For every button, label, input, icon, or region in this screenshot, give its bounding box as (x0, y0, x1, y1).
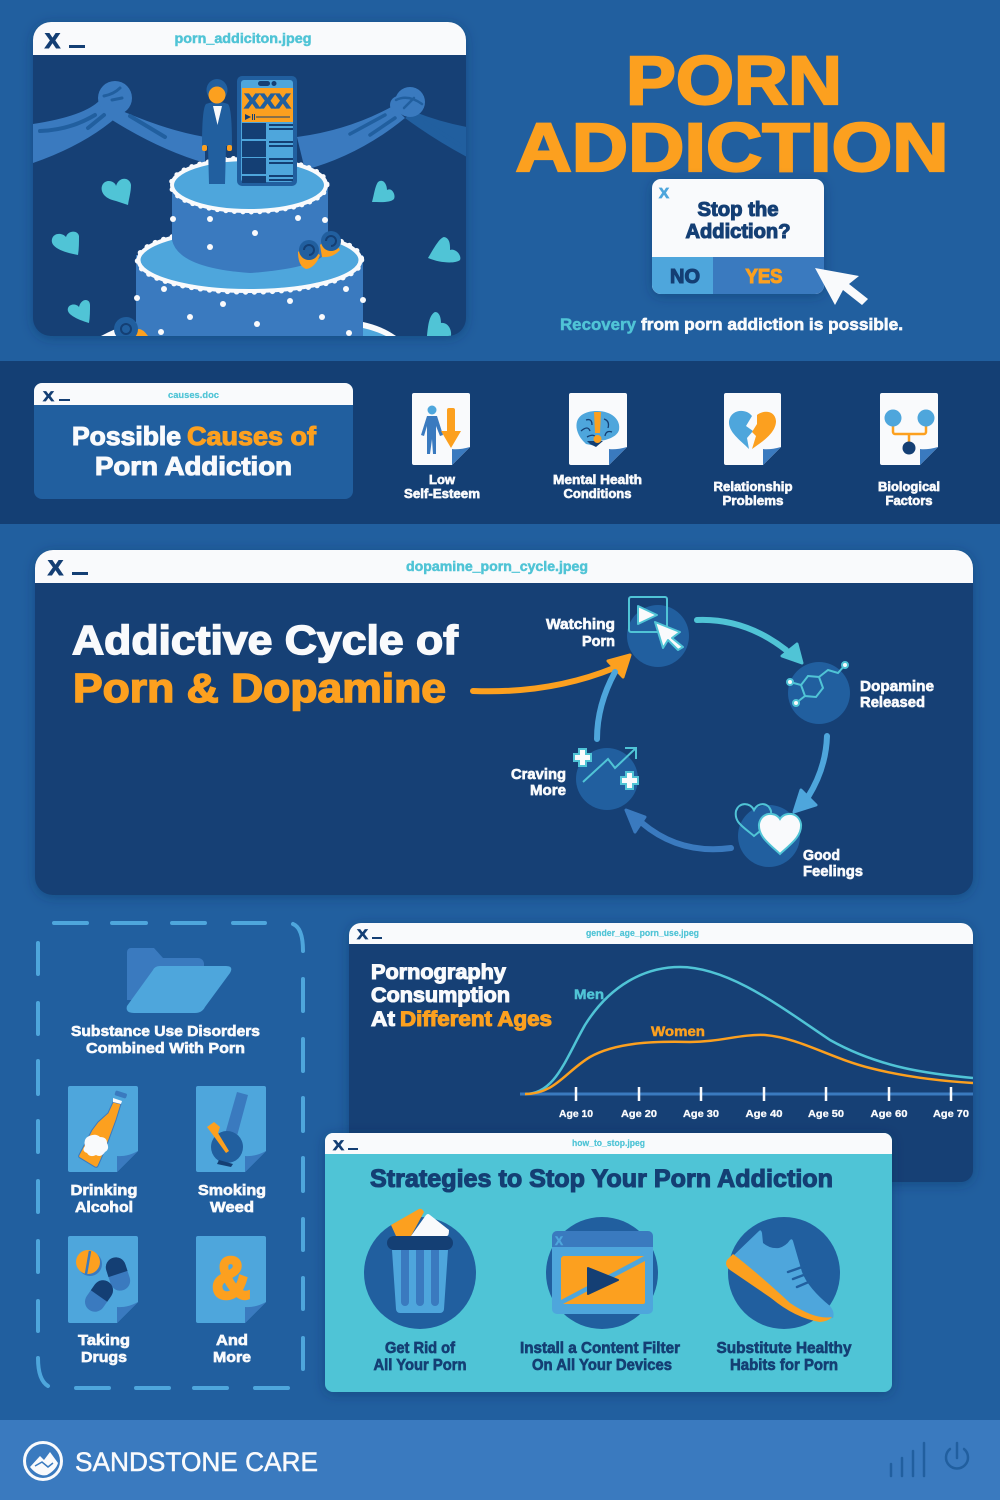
panel: causes heading: Causes of (187, 421, 316, 451)
popup: stop the addiction (652, 179, 868, 305)
cause: low self-esteem: Low (429, 472, 456, 487)
cause: mental health (553, 393, 642, 501)
panel: causes heading (34, 383, 353, 499)
cause: mental health: Conditions (564, 486, 632, 501)
panel: wedding cake window (33, 22, 467, 341)
step: watching porn: Porn (582, 633, 615, 650)
line chart: Women (651, 1023, 705, 1039)
item: and more: & (212, 1246, 250, 1311)
dashed border (38, 923, 303, 1388)
step: dopamine released: Dopamine (860, 678, 934, 695)
line chart: Men (574, 986, 604, 1002)
illustration: cake and ribbons: XXX (244, 91, 291, 113)
step: watching porn (546, 597, 689, 667)
chart heading: At (371, 1008, 395, 1031)
strategy: healthy habits: Habits for Porn (730, 1357, 838, 1374)
step: good feelings (736, 804, 863, 880)
panel: addictive cycle: X (48, 557, 63, 580)
icon: signal bars and power (891, 1443, 968, 1476)
cause: biological factors (878, 393, 940, 508)
title: ADDICTION (516, 109, 948, 186)
panel: wedding cake window: X (45, 30, 60, 53)
item: smoking weed: Weed (210, 1199, 254, 1216)
strategy: content filter: Install a Content Filter (520, 1340, 680, 1357)
popup: stop the addiction: X (659, 185, 669, 202)
heading (71, 1023, 260, 1057)
line chart: Age 70 (933, 1108, 969, 1120)
heading: Addictive Cycle of (72, 617, 458, 663)
logo (24, 1442, 62, 1480)
item: drinking alcohol: Alcohol (75, 1199, 133, 1216)
step: good feelings: Good (803, 847, 840, 864)
strategies heading: Strategies to Stop Your Porn Addiction (370, 1165, 833, 1193)
arrow: back to watching (597, 672, 615, 739)
chart heading: Consumption (371, 984, 510, 1007)
icon: folder (127, 948, 231, 1013)
line chart: Age 50 (808, 1108, 844, 1120)
roses (298, 249, 320, 269)
panel: causes heading: causes.doc (168, 390, 219, 400)
item: drinking alcohol (68, 1086, 138, 1216)
recovery statement: Recovery (560, 315, 637, 334)
cake tiers (101, 322, 396, 336)
strategy: get rid of porn: Get Rid of (385, 1340, 456, 1357)
cause: relationship problems: Problems (722, 493, 784, 508)
panel: age chart: X (357, 926, 369, 942)
heading: Substance Use Disorders (71, 1023, 260, 1040)
panel: causes heading: Porn Addiction (95, 451, 292, 481)
strategy: get rid of porn (364, 1209, 476, 1374)
step: craving more: More (530, 782, 566, 799)
line chart (520, 967, 973, 1120)
panel: age chart: gender_age_porn_use.jpeg (586, 928, 699, 938)
phone with XXX (237, 76, 297, 186)
line chart: Age 10 (559, 1108, 593, 1120)
line chart: Age 20 (621, 1108, 657, 1120)
popup: stop the addiction: Stop the (698, 199, 778, 221)
item: taking drugs: Drugs (81, 1349, 127, 1366)
strategy: get rid of porn: All Your Porn (374, 1357, 466, 1374)
strategy: content filter: On All Your Devices (532, 1357, 672, 1374)
item: smoking weed (196, 1086, 266, 1216)
cause: relationship problems: Relationship (714, 479, 793, 494)
cause: biological factors: Factors (886, 493, 932, 508)
step: dopamine released (787, 662, 934, 724)
chart heading: Different Ages (400, 1008, 552, 1031)
illustration: cake and ribbons (33, 76, 467, 341)
step: dopamine released: Released (860, 694, 925, 711)
title (516, 42, 948, 186)
item: and more: More (213, 1349, 251, 1366)
arrow: to craving (626, 810, 731, 849)
item: and more (196, 1236, 266, 1366)
panel: wedding cake window: porn_addiciton.jpeg (174, 30, 312, 46)
line chart: Age 30 (683, 1108, 719, 1120)
step: good feelings: Feelings (803, 863, 863, 880)
strategy: healthy habits (716, 1217, 852, 1374)
footer (0, 1420, 1000, 1500)
cause: low self-esteem (404, 393, 480, 501)
popup: stop the addiction: NO (670, 266, 700, 288)
heading: Porn & Dopamine (73, 665, 446, 711)
recovery statement: from porn addiction is possible. (641, 315, 903, 334)
item: and more: And (216, 1332, 248, 1349)
band: possible causes (0, 361, 1000, 524)
groom figure (202, 102, 232, 184)
item: drinking alcohol: Drinking (70, 1182, 138, 1199)
strategy: content filter (520, 1217, 680, 1374)
panel: addictive cycle (35, 550, 973, 895)
panel: addictive cycle: dopamine_porn_cycle.jpeg (406, 558, 588, 574)
title: PORN (626, 42, 842, 119)
heading (72, 617, 458, 711)
strategy: healthy habits: Substitute Healthy (716, 1340, 852, 1357)
arrow: to good feelings (794, 736, 827, 812)
step: craving more: Craving (511, 766, 566, 783)
chart heading: Pornography (371, 961, 506, 984)
women curve (525, 1035, 973, 1094)
panel: causes heading: X (43, 388, 55, 404)
men curve (525, 967, 973, 1094)
line chart: Age 60 (870, 1108, 908, 1120)
popup: stop the addiction: YES (746, 266, 782, 288)
panel: strategies: how_to_stop.jpeg (572, 1138, 645, 1148)
item: taking drugs: Taking (78, 1332, 130, 1349)
footer: SANDSTONE CARE (75, 1447, 318, 1477)
panel: age chart (349, 923, 973, 1182)
cause: relationship problems (714, 393, 793, 508)
item: smoking weed: Smoking (198, 1182, 266, 1199)
icon: cursor (815, 268, 868, 305)
cause: mental health: Mental Health (553, 472, 642, 487)
item: taking drugs (68, 1236, 138, 1366)
cause: biological factors: Biological (878, 479, 940, 494)
line chart: Age 40 (746, 1108, 783, 1120)
arrow: to dopamine (697, 620, 802, 663)
panel: strategies: X (333, 1137, 345, 1153)
panel: strategies (325, 1133, 892, 1392)
step: craving more (511, 748, 638, 810)
arrow: entry into cycle (473, 655, 630, 691)
panel: substance use disorders (38, 923, 303, 1388)
heading: Combined With Porn (86, 1040, 245, 1057)
strategy: content filter: X (555, 1234, 563, 1248)
chart heading (371, 961, 552, 1031)
step: watching porn: Watching (546, 616, 615, 633)
popup: stop the addiction: Addiction? (686, 221, 790, 243)
cause: low self-esteem: Self-Esteem (404, 486, 480, 501)
panel: causes heading: Possible (72, 421, 181, 451)
